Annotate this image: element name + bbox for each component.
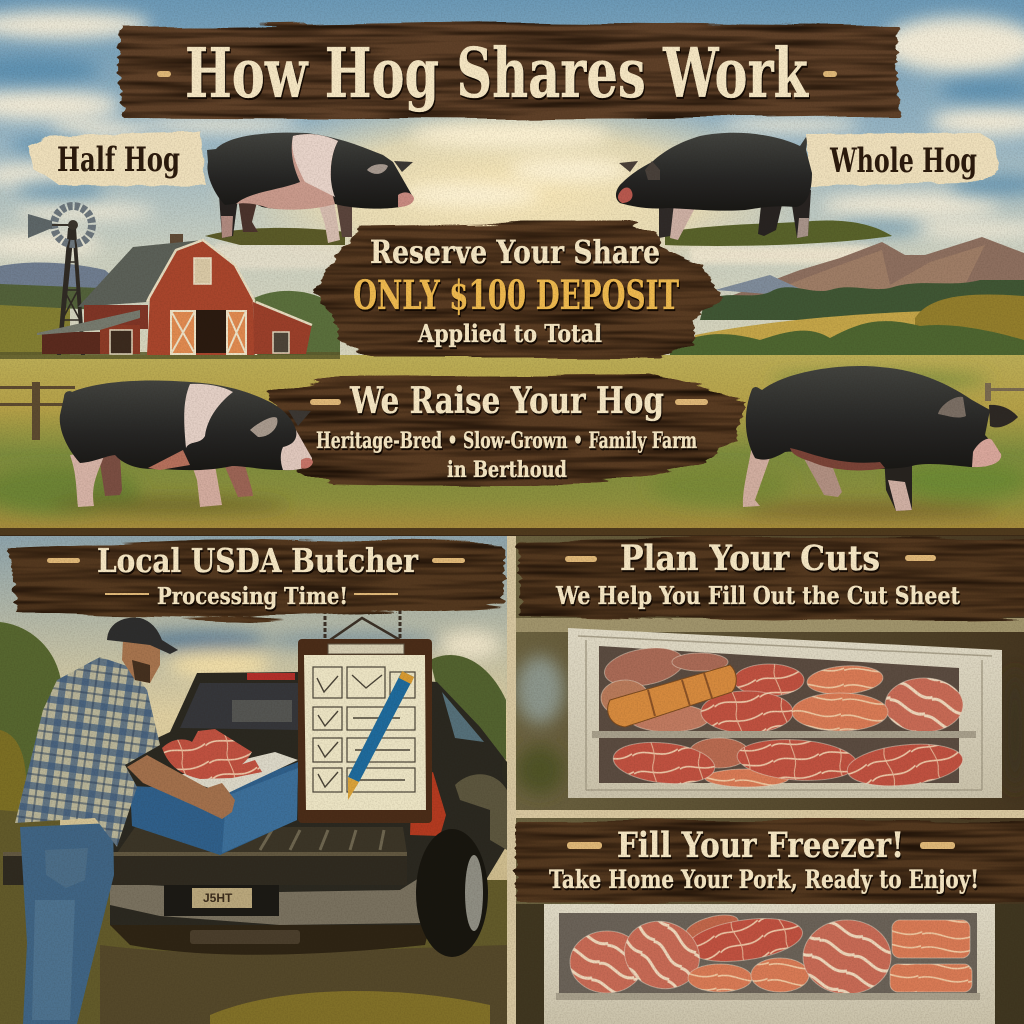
band between sections — [0, 528, 1024, 538]
wheel — [416, 829, 488, 957]
subtext: We Help You Fill Out the Cut Sheet — [555, 581, 960, 610]
illustration: freezer with pork cuts — [568, 628, 1002, 798]
subtext: Applied to Total — [417, 319, 602, 348]
panel: local usda butcher banner — [8, 538, 505, 620]
heading: Local USDA Butcher — [97, 541, 419, 580]
illustration: farmer in plaid shirt — [15, 618, 235, 1024]
panel: we raise your hog — [268, 374, 745, 486]
grass patch under top whole hog — [665, 221, 892, 246]
label: whole hog — [806, 133, 999, 186]
illustration: clipboard with checklist — [298, 610, 432, 823]
panel: reserve your share — [315, 222, 722, 358]
illustration: pickup truck — [3, 672, 507, 957]
roast tied with orange crust — [608, 665, 736, 727]
tailgate — [3, 852, 407, 885]
mountains and tree lines — [0, 237, 1024, 358]
title plank — [118, 22, 900, 120]
license plate — [192, 888, 252, 908]
label: half hog — [28, 131, 206, 186]
head and beard — [122, 640, 160, 683]
description: Heritage-Bred • Slow-Grown • Family Farm — [316, 428, 697, 454]
panel: we raise your hog: in Berthoud — [447, 457, 567, 483]
grass tufts and shadows — [0, 372, 1024, 516]
illustration: freezer full of pork — [544, 904, 995, 1024]
illustration: blue cooler with meat — [130, 729, 298, 855]
illustration: whole hog grazing — [743, 366, 1018, 511]
illustration: whole hog standing — [616, 133, 812, 240]
scene sky — [0, 536, 507, 896]
title text: How Hog Shares Work — [185, 34, 809, 114]
grass patch under top half hog — [205, 228, 345, 245]
heading: Plan Your Cuts — [620, 538, 880, 579]
panel: fill your freezer banner — [516, 810, 1024, 904]
ground — [0, 810, 507, 1024]
shirt — [15, 657, 160, 847]
trees — [0, 622, 506, 815]
heading: Fill Your Freezer! — [617, 825, 904, 866]
truck bumper — [110, 863, 443, 925]
subtext: Processing Time! — [157, 583, 348, 610]
ground: pasture — [0, 355, 1024, 535]
heading: We Raise Your Hog — [349, 380, 664, 422]
panel: plan your cuts banner — [518, 536, 1024, 622]
illustration: red barn — [37, 234, 312, 355]
freezer bottom shelf meat — [611, 736, 965, 791]
wooden fence right — [985, 383, 1024, 401]
panel: divider — [507, 536, 516, 1024]
shelf — [592, 731, 976, 738]
icon: windmill — [28, 206, 92, 355]
hitch — [190, 930, 300, 944]
pencil — [348, 671, 414, 800]
panel: butcher scene — [0, 536, 507, 1024]
taillight — [410, 772, 446, 836]
license plate: J5HT — [203, 891, 233, 905]
illustration: half hog grazing — [60, 380, 313, 507]
truck bed — [117, 827, 407, 853]
ground strip below barn — [0, 352, 340, 359]
arm — [127, 755, 235, 819]
cap — [107, 618, 178, 654]
jeans — [20, 823, 114, 1024]
right wall — [515, 536, 1024, 1024]
brake light — [247, 673, 295, 680]
deposit callout: ONLY $100 DEPOSIT — [353, 272, 679, 319]
freezer top shelf meat — [601, 642, 963, 733]
label: half hog: Half Hog — [57, 140, 180, 180]
background: sky with clouds — [0, 0, 1024, 360]
wooden fence left — [0, 382, 75, 440]
heading: Reserve Your Share — [370, 233, 660, 271]
illustration: half hog standing — [207, 133, 414, 243]
